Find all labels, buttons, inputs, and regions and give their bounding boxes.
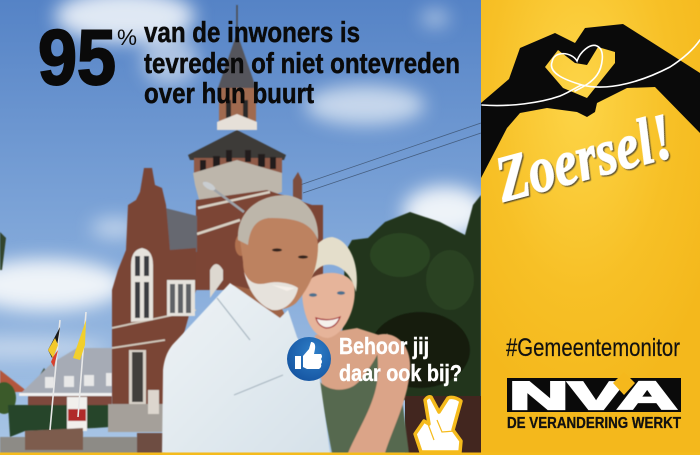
woman's arm — [348, 334, 410, 453]
logo: N-VA: NVA — [509, 375, 677, 418]
brick wall right — [405, 396, 481, 453]
headline text: over hun buurt — [144, 78, 314, 110]
callout: Behoor jij daar ook bij? — [339, 333, 462, 386]
headline text: tevreden of niet ontevreden — [144, 48, 460, 80]
woman's hair — [305, 237, 357, 292]
right panel: yellow background — [481, 0, 700, 453]
man's hair — [238, 195, 318, 245]
headline text — [144, 17, 460, 110]
logo: N-VA — [507, 372, 681, 418]
woman's green dress — [318, 333, 409, 453]
man's face — [240, 218, 318, 309]
man's ear — [235, 234, 247, 256]
headline statistic: 95%: 95 — [38, 13, 116, 101]
icon: heart-shaped hands — [481, 24, 700, 178]
headline statistic: 95%: % — [117, 25, 137, 50]
headline text: van de inwoners is — [144, 17, 360, 49]
town hall building — [108, 5, 323, 432]
left houses and garden — [0, 232, 165, 453]
flags — [48, 312, 86, 430]
woman's features — [309, 291, 345, 328]
icon: victory hand — [415, 397, 461, 452]
photo panel: town hall and couple — [0, 0, 487, 453]
sky with clouds — [0, 0, 487, 453]
man's features — [272, 248, 308, 291]
callout: Behoor jij daar ook bij?: Behoor jij — [339, 333, 429, 359]
background tree — [340, 195, 481, 400]
man's beard — [244, 272, 298, 310]
woman's face — [302, 273, 355, 338]
woman — [302, 237, 410, 453]
yellow baseline strip — [0, 452, 700, 455]
man — [162, 195, 330, 453]
man's shirt — [162, 283, 330, 453]
callout: Behoor jij daar ook bij?: daar ook bij? — [339, 360, 462, 386]
icon: thumbs up badge — [287, 337, 331, 381]
man's neck — [230, 285, 290, 325]
woman's chest — [315, 328, 382, 393]
